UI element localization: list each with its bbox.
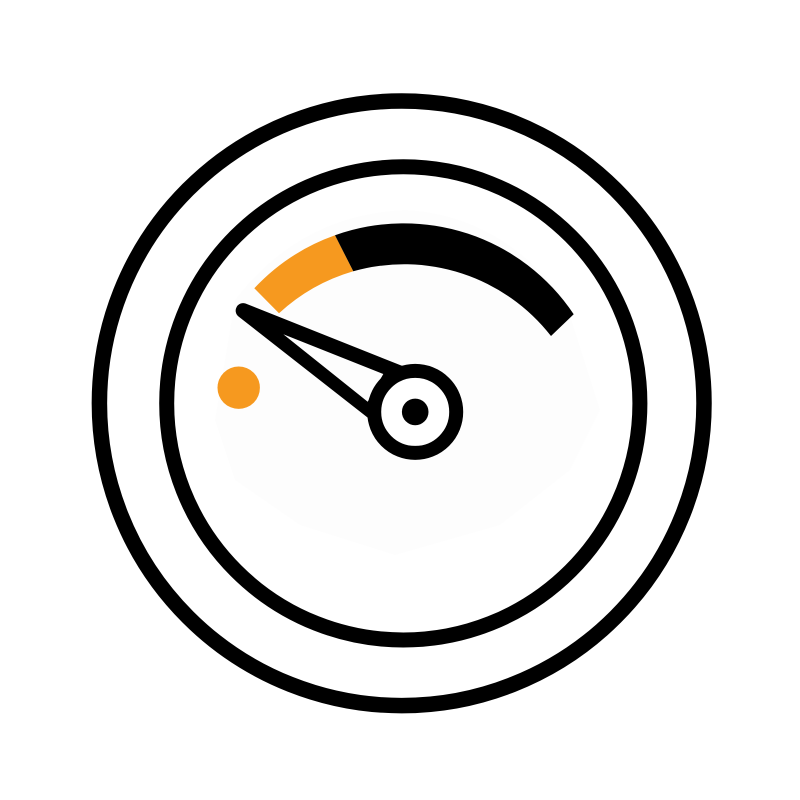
gauge arc: black segment <box>335 223 574 336</box>
needle <box>236 303 405 421</box>
outer ring <box>99 101 704 706</box>
needle hub <box>374 371 456 453</box>
inner ring <box>167 167 640 640</box>
orange indicator dot <box>218 366 260 409</box>
gauge arc: orange segment <box>254 235 353 313</box>
